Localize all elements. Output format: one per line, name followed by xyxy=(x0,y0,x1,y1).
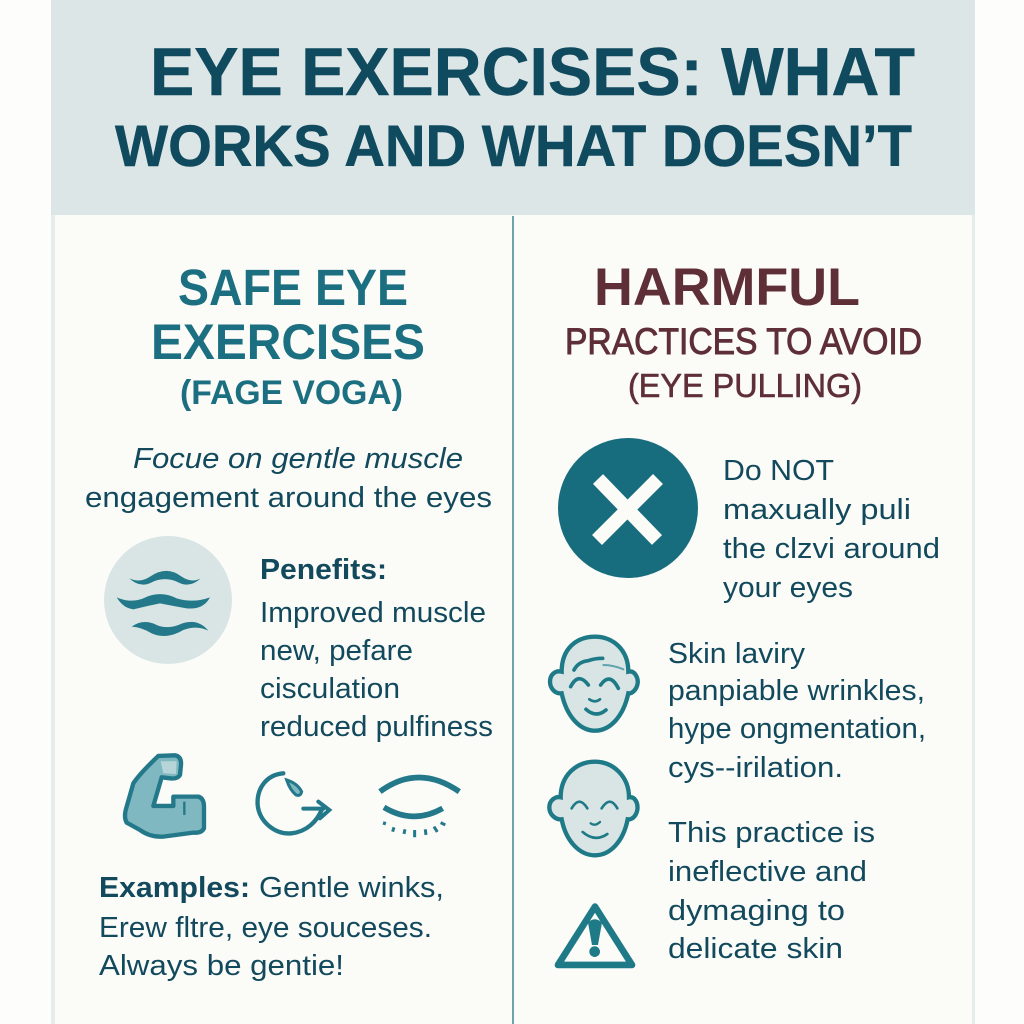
heading: safe eye exercises: EXERCISES xyxy=(151,314,425,370)
icon: warning triangle xyxy=(558,907,632,965)
warning text: the clzvi around xyxy=(723,533,940,565)
heading: safe eye exercises: (FAGE VOGA) xyxy=(180,374,403,412)
heading: harmful practices: (EYE PULLING) xyxy=(628,367,862,404)
skin damage text: Skin laviry xyxy=(668,638,806,670)
heading: harmful practices: HARMFUL xyxy=(594,258,860,317)
title: EYE EXERCISES: WHAT xyxy=(150,34,915,110)
examples text: Gentle winks, xyxy=(259,872,444,904)
header band xyxy=(51,0,975,215)
icon: wrinkled face xyxy=(550,637,638,731)
panel: harmful practices xyxy=(549,258,940,965)
skin damage text xyxy=(668,638,926,784)
ineffective text: This practice is xyxy=(668,817,875,849)
warning text xyxy=(723,455,940,604)
benefits text: cisculation xyxy=(260,673,400,705)
heading: harmful practices: PRACTICES TO AVOID xyxy=(565,321,922,362)
examples text: Examples: xyxy=(99,872,250,904)
title xyxy=(115,34,915,179)
panel: safe eye exercises xyxy=(85,259,493,982)
heading: harmful practices xyxy=(565,258,922,404)
skin damage text: hype ongmentation, xyxy=(668,713,926,745)
benefits text: reduced pulfiness xyxy=(260,711,493,743)
intro text: engagement around the eyes xyxy=(85,482,492,514)
heading: safe eye exercises: SAFE EYE xyxy=(178,259,408,316)
heading: safe eye exercises xyxy=(151,259,425,412)
title: WORKS AND WHAT DOESN’T xyxy=(115,114,912,179)
icon: circular arrow with drop xyxy=(258,773,329,833)
skin damage text: cys--irilation. xyxy=(668,752,843,784)
benefits text: Penefits: xyxy=(260,554,387,586)
skin damage text: panpiable wrinkles, xyxy=(668,675,925,707)
warning text: your eyes xyxy=(723,572,853,604)
icon: flexed arm xyxy=(125,755,204,837)
ineffective text xyxy=(668,817,875,965)
warning text: Do NOT xyxy=(723,455,834,487)
benefits text: new, pefare xyxy=(260,635,413,667)
examples text xyxy=(99,872,444,982)
warning text: maxually puli xyxy=(723,494,911,526)
ineffective text: dymaging to xyxy=(668,895,845,927)
benefits text xyxy=(260,554,493,743)
icon: closed eye xyxy=(380,777,459,837)
intro text xyxy=(85,443,492,514)
examples text: Always be gentie! xyxy=(99,950,344,982)
icon: X circle xyxy=(558,438,698,578)
examples text: Erew fltre, eye souceses. xyxy=(99,912,432,944)
ineffective text: delicate skin xyxy=(668,933,843,965)
intro text: Focue on gentle muscle xyxy=(133,443,463,475)
panels background xyxy=(55,215,972,1024)
ineffective text: ineflective and xyxy=(668,856,867,888)
benefits text: Improved muscle xyxy=(260,597,486,629)
icon: waves circle xyxy=(104,536,232,664)
icon: smiling face xyxy=(549,762,637,855)
